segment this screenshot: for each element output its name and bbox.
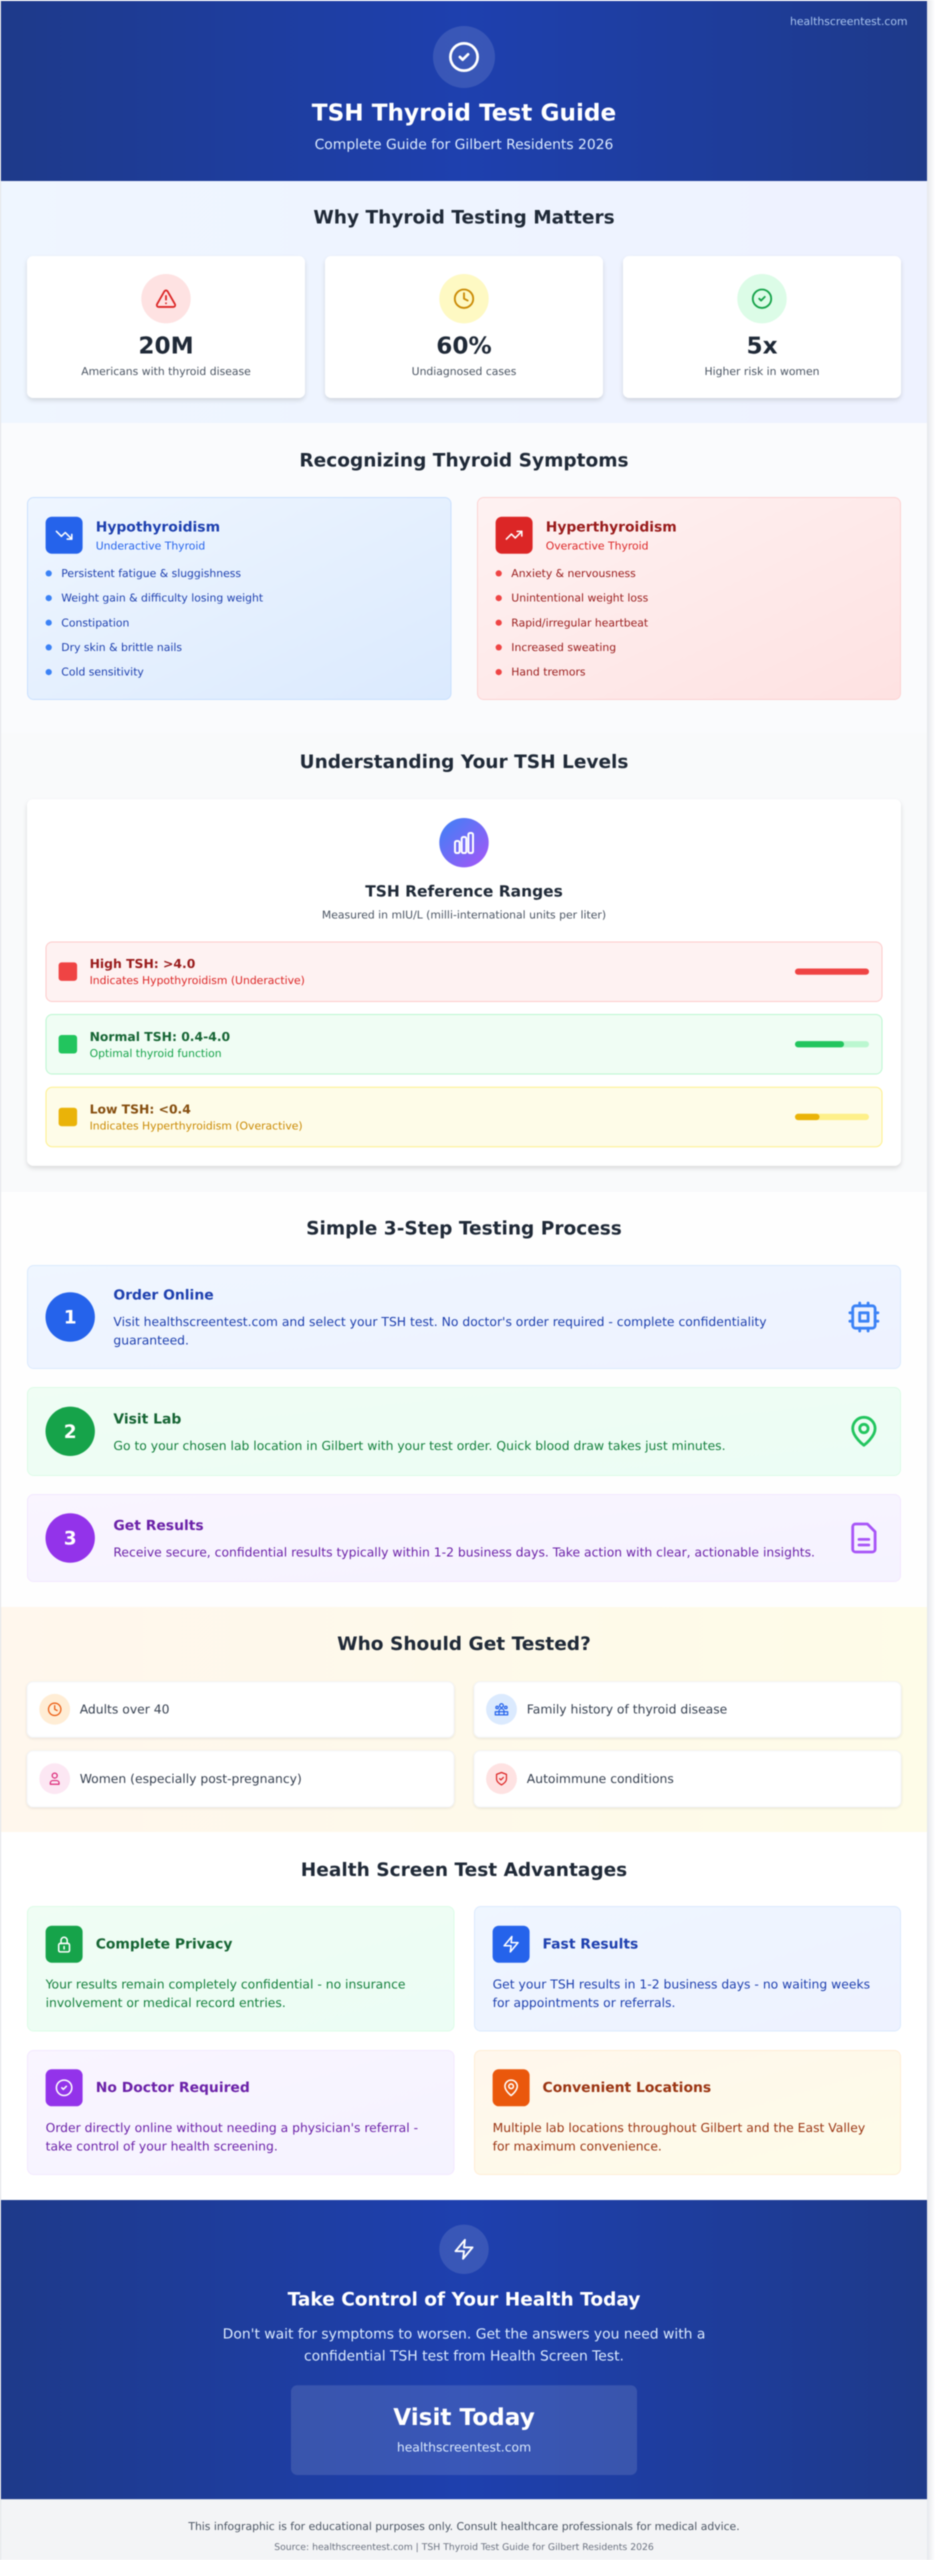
symptom list: Constipation xyxy=(61,616,129,629)
card: complete privacy: Your results remain completely confidential - no insurance xyxy=(45,1977,405,1991)
range row: high: High TSH: >4.0 xyxy=(90,957,196,971)
heading: Simple 3-Step Testing Process xyxy=(306,1218,622,1240)
item: family history: Family history of thyroid disease xyxy=(527,1703,727,1717)
item: adults over 40: Adults over 40 xyxy=(80,1703,170,1717)
footer: This infographic is for educational purposes only. Consult healthcare professionals for medical advice. xyxy=(187,2520,740,2533)
step 2 xyxy=(28,1388,900,1476)
panel: hyperthyroidism: Overactive Thyroid xyxy=(546,539,649,552)
range row: low xyxy=(46,1087,882,1147)
heading: Recognizing Thyroid Symptoms xyxy=(299,450,629,472)
call to action: Don't wait for symptoms to worsen. Get the answers you need with a xyxy=(223,2327,705,2343)
card: convenient locations xyxy=(474,2050,900,2174)
card: complete privacy xyxy=(28,1906,454,2031)
range row: low: Low TSH: <0.4 xyxy=(90,1102,191,1116)
icon: map pin xyxy=(853,1417,875,1445)
step 3: Get Results xyxy=(113,1518,204,1534)
header xyxy=(1,1,927,181)
step 1: Order Online xyxy=(113,1288,214,1304)
panel: TSH reference card: Measured in mIU/L (milli-international units per liter) xyxy=(322,909,606,922)
stat card: 20M xyxy=(27,256,305,398)
item: women xyxy=(27,1751,454,1807)
section: understanding TSH levels xyxy=(1,733,927,1192)
panel: hyperthyroidism xyxy=(478,498,900,700)
item: women: Women (especially post-pregnancy) xyxy=(80,1772,302,1786)
symptom list: Cold sensitivity xyxy=(61,666,144,679)
panel: hypothyroidism: Hypothyroidism xyxy=(96,520,220,536)
symptom list xyxy=(46,567,263,679)
stat card: 5x xyxy=(623,256,901,398)
panel: hypothyroidism: Underactive Thyroid xyxy=(96,539,205,552)
heading: Why Thyroid Testing Matters xyxy=(313,208,615,228)
button: visit today: healthscreentest.com xyxy=(397,2440,531,2454)
symptom list: Dry skin & brittle nails xyxy=(61,641,182,654)
step 1 xyxy=(28,1266,900,1368)
symptom list: Weight gain & difficulty losing weight xyxy=(61,592,263,605)
step 3 xyxy=(28,1494,900,1582)
section: advantages xyxy=(1,1832,927,2200)
icon: lightning xyxy=(439,2225,489,2274)
symptom list: Hand tremors xyxy=(511,666,586,679)
step 2: 2 xyxy=(64,1422,77,1443)
heading: Understanding Your TSH Levels xyxy=(300,752,628,773)
title: TSH Thyroid Test Guide xyxy=(312,100,616,127)
card: fast results: for appointments or referrals. xyxy=(493,1996,675,2010)
step 1: guaranteed. xyxy=(113,1334,189,1348)
panel: hypothyroidism xyxy=(28,498,451,700)
panel: TSH reference card: TSH Reference Ranges xyxy=(365,883,563,901)
range row: normal xyxy=(46,1014,882,1074)
card: fast results xyxy=(474,1906,900,2031)
item: autoimmune xyxy=(474,1751,901,1807)
step 2: Go to your chosen lab location in Gilbert with your test order. Quick blood draw takes just minutes. xyxy=(113,1439,726,1453)
section: recognizing symptoms xyxy=(1,423,927,733)
footer xyxy=(1,2499,927,2560)
stat card: 60% xyxy=(325,256,603,398)
site address: healthscreentest.com xyxy=(790,15,908,28)
card: fast results: Get your TSH results in 1-2 business days - no waiting weeks xyxy=(493,1977,870,1991)
stat card: 60%: Undiagnosed cases xyxy=(412,365,517,378)
panel: hyperthyroidism: Hyperthyroidism xyxy=(546,520,677,536)
card: fast results: Fast Results xyxy=(542,1936,638,1952)
icon: trending down xyxy=(46,517,83,554)
card: no doctor required: take control of your health screening. xyxy=(46,2140,278,2154)
item: family history xyxy=(474,1682,901,1737)
panel: TSH reference card xyxy=(27,799,901,1166)
step 1: 1 xyxy=(64,1308,77,1329)
heading: Who Should Get Tested? xyxy=(337,1634,591,1655)
range row: high: Indicates Hypothyroidism (Underactive) xyxy=(90,974,305,987)
button: visit today xyxy=(291,2385,637,2475)
heading: Health Screen Test Advantages xyxy=(301,1860,627,1881)
card: no doctor required: No Doctor Required xyxy=(96,2080,250,2096)
button: visit today: Visit Today xyxy=(393,2404,535,2431)
step 3: Receive secure, confidential results typically within 1-2 business days. Take action with clear, actionable insights. xyxy=(113,1546,815,1560)
section: 3-step process xyxy=(1,1192,927,1607)
range row: normal: Optimal thyroid function xyxy=(90,1047,222,1060)
stat card: 20M: Americans with thyroid disease xyxy=(81,365,251,378)
item: autoimmune: Autoimmune conditions xyxy=(527,1772,674,1786)
step 1: Visit healthscreentest.com and select your TSH test. No doctor's order required - complete confidentiality xyxy=(113,1315,767,1329)
card: complete privacy: involvement or medical record entries. xyxy=(46,1996,286,2010)
icon: trending up xyxy=(496,517,533,554)
icon: document xyxy=(853,1524,875,1552)
icon: bar chart xyxy=(439,818,489,867)
symptom list: Anxiety & nervousness xyxy=(511,567,636,580)
symptom list: Unintentional weight loss xyxy=(511,592,649,605)
symptom list: Rapid/irregular heartbeat xyxy=(511,616,648,629)
step 3: 3 xyxy=(64,1529,77,1550)
stat card: 5x: Higher risk in women xyxy=(705,365,819,378)
range row: low: Indicates Hyperthyroidism (Overactive) xyxy=(90,1120,303,1133)
card: no doctor required: Order directly online without needing a physician's referral - xyxy=(46,2121,418,2135)
card: convenient locations: for maximum convenience. xyxy=(493,2140,662,2154)
call to action: confidential TSH test from Health Screen Test. xyxy=(304,2348,624,2364)
step 2: Visit Lab xyxy=(113,1411,181,1427)
icon: check badge xyxy=(433,26,495,88)
symptom list: Persistent fatigue & sluggishness xyxy=(61,567,241,580)
stat card: 5x: 5x xyxy=(746,332,778,360)
range row: normal: Normal TSH: 0.4-4.0 xyxy=(90,1030,231,1044)
card: convenient locations: Multiple lab locations throughout Gilbert and the East Valley xyxy=(493,2121,865,2135)
icon: chip xyxy=(850,1303,878,1331)
symptom list xyxy=(496,567,649,679)
card: no doctor required xyxy=(28,2050,454,2174)
footer: Source: healthscreentest.com | TSH Thyroid Test Guide for Gilbert Residents 2026 xyxy=(274,2542,654,2553)
card: complete privacy: Complete Privacy xyxy=(96,1936,232,1952)
range row: high xyxy=(46,942,882,1002)
stat card: 20M: 20M xyxy=(138,332,194,360)
call to action xyxy=(1,2200,927,2499)
section: who should get tested xyxy=(1,1607,927,1832)
stat card: 60%: 60% xyxy=(436,332,492,360)
subtitle: Complete Guide for Gilbert Residents 2026 xyxy=(315,137,613,153)
section: why thyroid testing matters xyxy=(1,181,927,423)
item: adults over 40 xyxy=(27,1682,454,1737)
card: convenient locations: Convenient Locations xyxy=(542,2080,711,2096)
call to action: Take Control of Your Health Today xyxy=(288,2289,640,2310)
symptom list: Increased sweating xyxy=(511,641,616,654)
